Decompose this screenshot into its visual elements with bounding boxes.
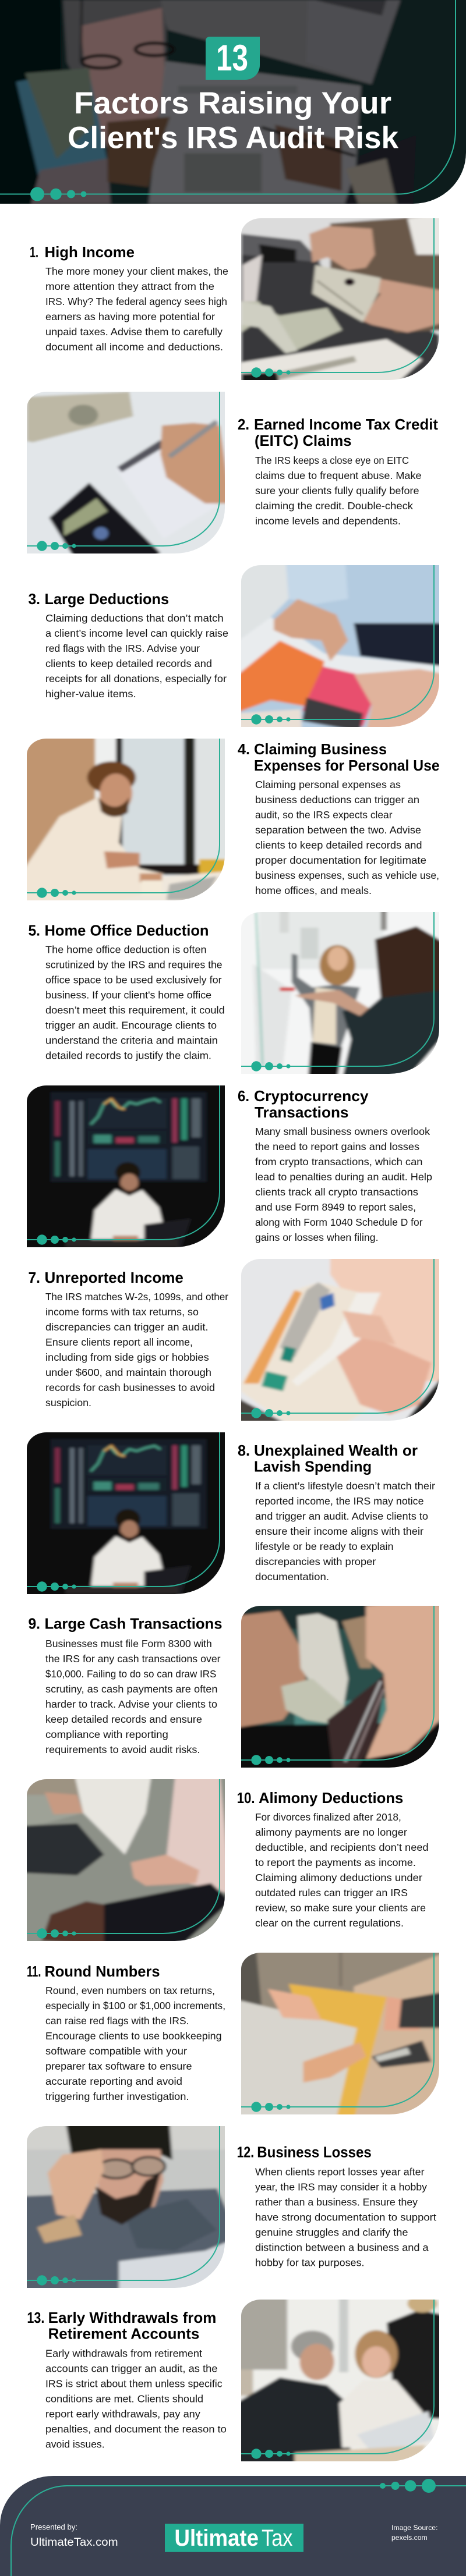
body text 9: [45, 1638, 221, 1755]
body text 8: reported income, the IRS may notice: [255, 1495, 424, 1507]
section 3: Large Deductions: [28, 560, 445, 732]
body text 6: from crypto transactions, which can: [255, 1156, 423, 1168]
body text 12: genuine struggles and clarify the: [255, 2226, 408, 2238]
body text 6: lead to penalties during an audit. Help: [255, 1171, 432, 1183]
header dots: [30, 187, 86, 201]
body text 7: suspicion.: [45, 1397, 91, 1408]
body text 7: The IRS matches W-2s, 1099s, and other: [45, 1291, 228, 1303]
body text 13: report early withdrawals, pay any: [45, 2408, 200, 2419]
body text 12: rather than a business. Ensure they: [255, 2196, 418, 2208]
header banner: [0, 0, 466, 211]
photo 2: notebook and calculator: [27, 392, 225, 553]
heading 9: Large Cash Transactions: [44, 1615, 223, 1633]
presented by: [30, 2522, 118, 2549]
section 2: EITC Claims: [21, 386, 438, 559]
photo 7: hand pulling euro notes: [235, 1254, 445, 1426]
body text 10: review, so make sure your clients are: [255, 1902, 426, 1914]
body text 7: discrepancies can trigger an audit.: [45, 1321, 209, 1333]
body text 11: especially in $100 or $1,000 increments,: [45, 2000, 225, 2011]
photo 8: trader in front of chart screen: [21, 1427, 231, 1599]
body text 13: accounts can trigger an audit, as the: [45, 2362, 218, 2374]
body text 9: $10,000. Failing to do so can draw IRS: [45, 1668, 216, 1680]
heading 3: Large Deductions: [44, 590, 169, 608]
body text 11: can raise red flags with the IRS.: [45, 2015, 189, 2027]
image source: Image Source:: [391, 2524, 438, 2532]
heading 5: 5.: [28, 922, 40, 939]
body text 1: earners as having more potential for: [45, 311, 215, 322]
heading 13: 13.: [27, 2309, 44, 2326]
body text 4: audit, so the IRS expects clear: [255, 809, 393, 821]
body text 3: Claiming deductions that don’t match: [45, 612, 224, 624]
heading 5: Home Office Deduction: [44, 922, 209, 939]
section 9: Large Cash Transactions: [28, 1601, 445, 1773]
section 5: Home Office Deduction: [28, 907, 445, 1079]
image source: pexels.com: [391, 2534, 428, 2542]
heading 11: Round Numbers: [44, 1963, 160, 1980]
heading 6: Cryptocurrency: [254, 1087, 369, 1105]
section 7: Unreported Income: [28, 1254, 445, 1426]
heading 8: Lavish Spending: [254, 1458, 372, 1475]
section 1: High Income: [30, 213, 445, 385]
body text 2: claims due to frequent abuse. Make: [255, 470, 422, 481]
body text 1: [45, 265, 228, 353]
body text 8: [255, 1480, 435, 1582]
heading 8: [238, 1442, 418, 1475]
body text 8: lifestyle or be ready to explain: [255, 1541, 394, 1552]
body text 10: clear on the current regulations.: [255, 1917, 404, 1929]
logo: UltimateTax: Ultimate: [175, 2525, 259, 2551]
photo 3: pink calculator and orange receipts: [241, 565, 439, 727]
body text 10: deductible, and recipients don’t need: [255, 1841, 429, 1853]
body text 13: avoid issues.: [45, 2438, 105, 2450]
heading 1: 1.: [30, 243, 38, 261]
logo: UltimateTax: [165, 2524, 303, 2552]
body text 4: business deductions can trigger an: [255, 794, 419, 806]
body text 6: Many small business owners overlook: [255, 1126, 430, 1137]
photo 12: worried man adjusting glasses: [21, 2121, 231, 2293]
body text 9: the IRS for any cash transactions over: [45, 1653, 221, 1665]
body text 11: triggering further investigation.: [45, 2091, 189, 2102]
body text 5: business. If your client's home office: [45, 989, 211, 1001]
body text 10: [255, 1811, 429, 1929]
body text 2: claiming the credit. Double-check: [255, 500, 413, 512]
body text 6: clients track all crypto transactions: [255, 1186, 418, 1198]
body text 12: [255, 2166, 436, 2268]
body text 12: have strong documentation to support: [255, 2211, 436, 2223]
body text 1: IRS. Why? The federal agency sees high: [45, 296, 227, 307]
section 13: Early Withdrawals: [27, 2294, 445, 2467]
heading 4: 4.: [238, 740, 250, 758]
presented by: UltimateTax.com: [30, 2536, 118, 2549]
heading 12: 12.: [237, 2144, 254, 2161]
body text 5: [45, 944, 225, 1062]
heading 11: 11.: [27, 1963, 41, 1980]
presented by: Presented by:: [30, 2522, 77, 2532]
body text 10: alimony payments are no longer: [255, 1826, 407, 1838]
body text 13: Early withdrawals from retirement: [45, 2347, 202, 2359]
section 6: Cryptocurrency Transactions: [21, 1080, 432, 1252]
body text 6: the need to report gains and losses: [255, 1141, 419, 1152]
body text 7: records for cash businesses to avoid: [45, 1382, 215, 1393]
body text 6: gains or losses when filing.: [255, 1232, 379, 1243]
photo 9: hands opening a wallet of dollars: [235, 1601, 445, 1773]
main title: Factors Raising Your: [74, 86, 391, 120]
photo 13: business team reviewing papers: [235, 2294, 445, 2467]
heading 13: [27, 2309, 216, 2343]
section 10: Alimony Deductions: [21, 1774, 429, 1946]
body text 7: Ensure clients report all income,: [45, 1336, 193, 1348]
heading 1: High Income: [44, 243, 135, 261]
body text 11: [45, 1985, 225, 2102]
body text 10: For divorces finalized after 2018,: [255, 1811, 401, 1823]
heading 6: 6.: [238, 1087, 249, 1105]
body text 3: [45, 612, 228, 700]
number badge: 13: [216, 38, 248, 79]
heading 8: 8.: [238, 1442, 250, 1459]
body text 10: Claiming alimony deductions under: [255, 1872, 422, 1883]
body text 2: income levels and dependents.: [255, 515, 401, 527]
body text 11: software compatible with your: [45, 2045, 187, 2057]
body text 4: home offices, and meals.: [255, 885, 372, 896]
body text 9: keep detailed records and ensure: [45, 1713, 202, 1725]
heading 8: Unexplained Wealth or: [254, 1442, 418, 1459]
body text 11: accurate reporting and avoid: [45, 2075, 182, 2087]
body text 5: doesn’t meet this requirement, it could: [45, 1005, 225, 1016]
body text 1: document all income and deductions.: [45, 341, 223, 353]
photo 10: couple on a sofa: [21, 1774, 231, 1946]
body text 5: detailed records to justify the claim.: [45, 1050, 211, 1062]
body text 9: compliance with reporting: [45, 1729, 168, 1740]
body text 11: Encourage clients to use bookkeeping: [45, 2030, 222, 2042]
body text 1: more attention they attract from the: [45, 281, 214, 292]
body text 2: The IRS keeps a close eye on EITC: [255, 455, 409, 466]
body text 5: The home office deduction is often: [45, 944, 207, 956]
section 12: Business Losses: [21, 2121, 436, 2293]
heading 3: 3.: [28, 590, 40, 608]
heading 2: 2.: [238, 416, 249, 433]
section 4: Business Expenses: [21, 733, 440, 906]
body text 13: [45, 2347, 227, 2450]
body text 7: income forms with tax returns, so: [45, 1306, 199, 1318]
body text 9: Businesses must file Form 8300 with: [45, 1638, 212, 1649]
body text 8: discrepancies with proper: [255, 1556, 376, 1567]
photo 6: trader in front of chart screen: [21, 1080, 231, 1252]
body text 9: requirements to avoid audit risks.: [45, 1744, 200, 1755]
section 11: Round Numbers: [27, 1947, 445, 2120]
body text 2: [255, 455, 422, 527]
body text 3: a client’s income level can quickly raise: [45, 627, 228, 639]
heading 13: Early Withdrawals from: [48, 2309, 216, 2326]
photo 1: hands counting cash: [241, 218, 439, 380]
body text 8: and trigger an audit. Advise clients to: [255, 1510, 428, 1522]
photo 5: two women at a whiteboard: [235, 907, 445, 1079]
heading 7: Unreported Income: [44, 1269, 183, 1286]
main title: [68, 86, 399, 155]
heading 6: [238, 1087, 369, 1121]
body text 11: preparer tax software to ensure: [45, 2060, 192, 2072]
heading 4: Expenses for Personal Use: [254, 757, 440, 774]
body text 1: The more money your client makes, the: [45, 265, 228, 277]
body text 13: penalties, and document the reason to: [45, 2423, 227, 2435]
body text 12: hobby for tax purposes.: [255, 2256, 365, 2268]
body text 12: distinction between a business and a: [255, 2241, 429, 2253]
body text 4: business expenses, such as vehicle use,: [255, 870, 439, 881]
header photo background: [0, 0, 466, 211]
heading 10: 10.: [237, 1789, 255, 1807]
body text 2: sure your clients fully qualify before: [255, 485, 419, 496]
body text 7: including from side gigs or hobbies: [45, 1351, 209, 1363]
section 8: Unexplained Wealth: [21, 1427, 435, 1599]
body text 9: harder to track. Advise your clients to: [45, 1698, 217, 1710]
body text 5: trigger an audit. Encourage clients to: [45, 1020, 217, 1031]
heading 2: Earned Income Tax Credit: [254, 416, 438, 433]
body text 5: office space to be used exclusively for: [45, 974, 222, 986]
heading 12: Business Losses: [257, 2144, 372, 2161]
heading 13: Retirement Accounts: [48, 2325, 199, 2343]
body text 5: scrutinized by the IRS and requires the: [45, 959, 223, 971]
body text 3: receipts for all donations, especially for: [45, 673, 227, 684]
body text 5: understand the criteria and maintain: [45, 1035, 218, 1046]
body text 7: under $600, and maintain thorough: [45, 1367, 211, 1378]
image source: [391, 2524, 438, 2542]
body text 9: scrutiny, as cash payments are often: [45, 1683, 218, 1695]
main title: Client's IRS Audit Risk: [68, 121, 399, 155]
heading 10: Alimony Deductions: [259, 1789, 403, 1807]
body text 12: When clients report losses year after: [255, 2166, 425, 2177]
body text 4: Claiming personal expenses as: [255, 779, 401, 790]
body text 12: year, the IRS may consider it a hobby: [255, 2181, 427, 2192]
body text 8: If a client’s lifestyle doesn’t match their: [255, 1480, 435, 1492]
heading 7: 7.: [28, 1269, 40, 1286]
body text 3: red flags with the IRS. Advise your: [45, 643, 200, 654]
body text 7: [45, 1291, 228, 1408]
body text 4: separation between the two. Advise: [255, 824, 421, 836]
heading 9: 9.: [28, 1615, 40, 1633]
body text 6: and use Form 8949 to report sales,: [255, 1201, 416, 1213]
logo: UltimateTax: Tax: [262, 2525, 292, 2551]
heading 4: [238, 740, 440, 774]
photo 11: yellow folder and documents on desk: [235, 1947, 445, 2120]
body text 4: clients to keep detailed records and: [255, 839, 422, 851]
heading 2: (EITC) Claims: [255, 432, 352, 449]
body text 4: proper documentation for legitimate: [255, 854, 426, 866]
footer: [0, 2476, 466, 2576]
body text 13: IRS is strict about them unless specific: [45, 2378, 223, 2389]
heading 2: [238, 416, 438, 449]
body text 11: Round, even numbers on tax returns,: [45, 1985, 215, 1996]
body text 3: higher-value items.: [45, 688, 136, 700]
footer dots: [380, 2479, 436, 2493]
body text 3: clients to keep detailed records and: [45, 658, 212, 669]
body text 8: ensure their income aligns with their: [255, 1525, 423, 1537]
body text 1: unpaid taxes. Advise them to carefully: [45, 326, 223, 338]
body text 6: [255, 1126, 432, 1243]
footer background: [0, 2476, 466, 2576]
body text 4: [255, 779, 439, 896]
body text 10: to report the payments as income.: [255, 1857, 416, 1868]
body text 6: along with Form 1040 Schedule D for: [255, 1216, 423, 1228]
body text 13: conditions are met. Clients should: [45, 2393, 203, 2404]
heading 4: Claiming Business: [254, 740, 387, 758]
heading 6: Transactions: [255, 1104, 348, 1121]
photo 4: man with phone at a desk: [21, 733, 231, 906]
body text 8: documentation.: [255, 1571, 329, 1582]
body text 10: outdated rules can trigger an IRS: [255, 1887, 408, 1899]
